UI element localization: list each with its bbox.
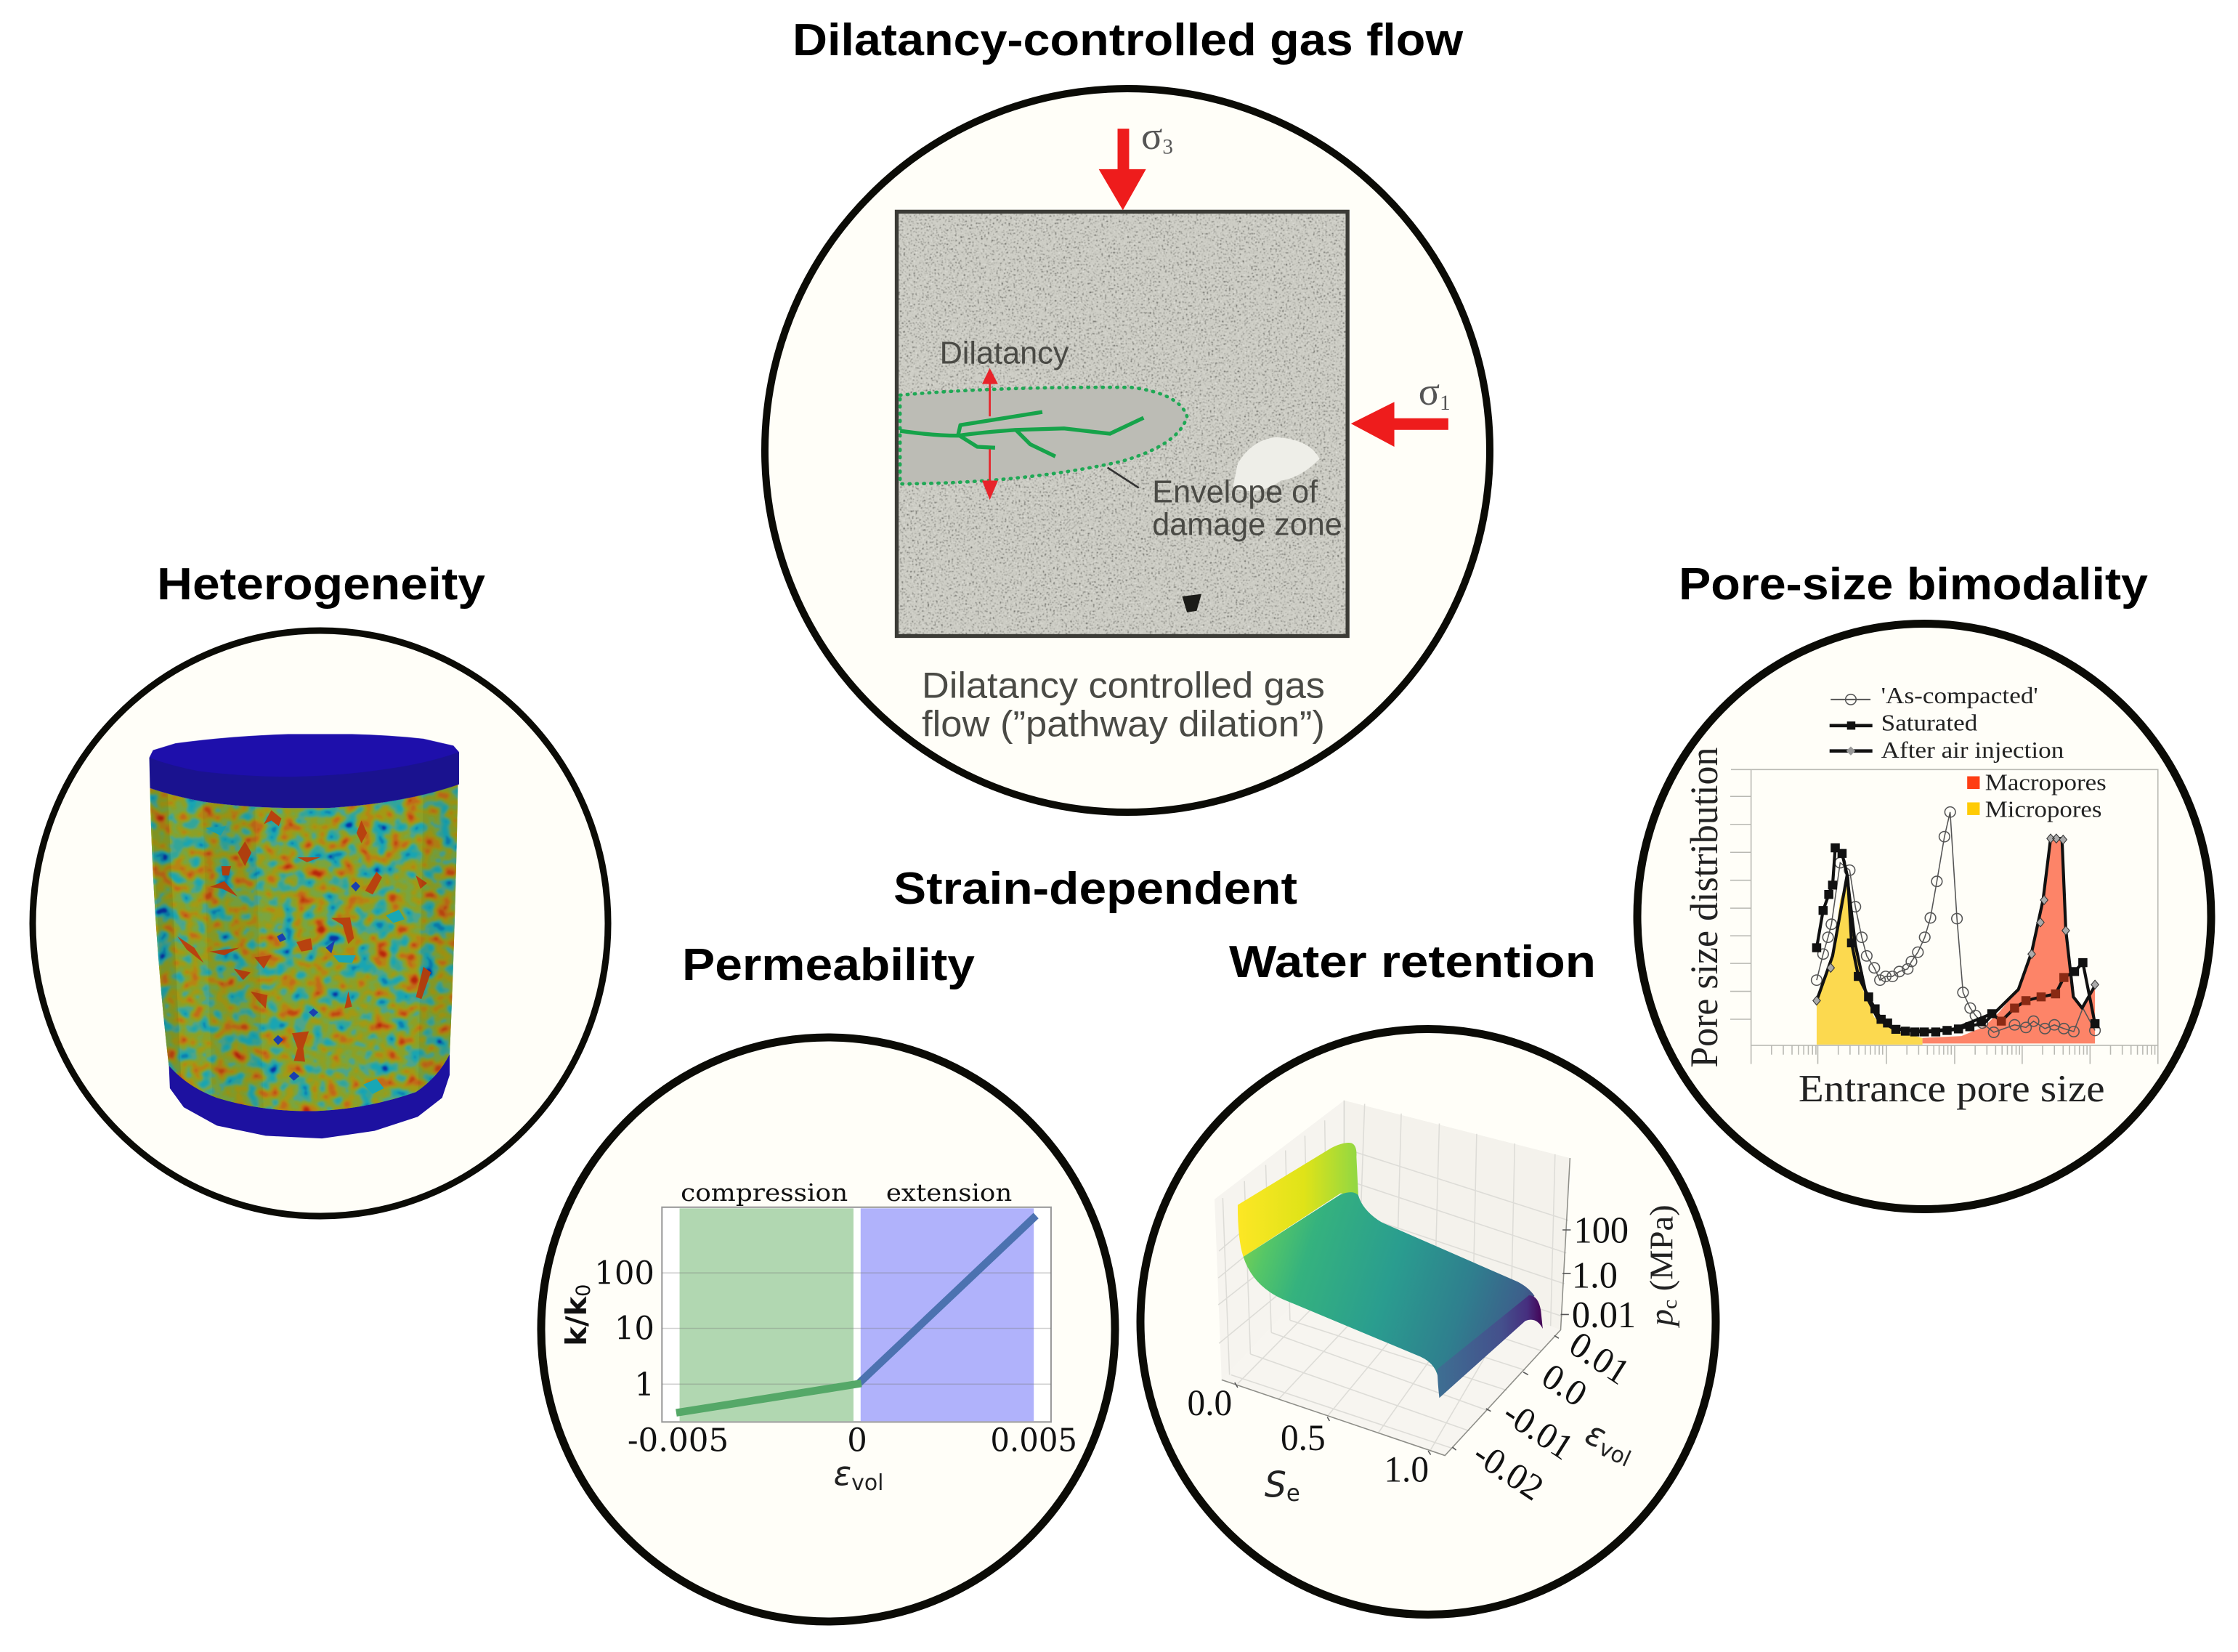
y tick labels: 10 — [615, 1310, 654, 1348]
caption: Dilatancy controlled gas — [922, 665, 1325, 706]
z ticks: 1.0 — [1572, 1255, 1618, 1297]
legend: pore types: Micropores — [1985, 796, 2101, 822]
legend: pore types — [1967, 769, 2107, 822]
extension line — [858, 1215, 1036, 1384]
legend: pore types: Macropores — [1985, 769, 2107, 795]
saturation ticks: 1.0 — [1384, 1449, 1429, 1490]
legend: series: 'As-compacted' — [1881, 682, 2038, 708]
heading: strain-dependent: Strain-dependent — [893, 864, 1297, 914]
surface end face — [1438, 1295, 1543, 1398]
arrow: sigma 3 — [1099, 129, 1146, 210]
label: dilatancy: Dilatancy — [940, 336, 1069, 371]
green fracture network — [900, 412, 1143, 456]
as-compacted series — [1812, 807, 2100, 1037]
y tick labels: 100 — [594, 1255, 654, 1292]
label: envelope of damage zone: Envelope of — [1152, 474, 1318, 509]
zone labels: extension — [886, 1179, 1012, 1207]
cylinder top band — [149, 752, 459, 808]
label: sigma 1: 1 — [1440, 392, 1451, 415]
x tick labels — [628, 1422, 1077, 1459]
label: envelope of damage zone: damage zone — [1152, 508, 1342, 543]
saturation ticks: 0.0 — [1188, 1382, 1232, 1423]
x tick labels: 0 — [847, 1422, 867, 1459]
cylinder top surface — [149, 734, 459, 777]
y axis label: Pore size distribution — [1682, 747, 1726, 1068]
strain axis label: ε — [1580, 1412, 1612, 1457]
panel: water retention circle — [1140, 1029, 1716, 1614]
y axis label: 0 — [572, 1284, 595, 1297]
x tick labels: -0.005 — [628, 1422, 729, 1459]
panel: pore-size circle — [1637, 623, 2211, 1209]
legend: series — [1830, 682, 2064, 763]
title: dilatancy-controlled gas flow: Dilatancy-controlled gas flow — [792, 15, 1464, 65]
strain ticks — [1467, 1323, 1637, 1509]
z ticks: 0.01 — [1572, 1294, 1636, 1336]
title: water retention: Water retention — [1229, 937, 1596, 987]
plot frame and ticks — [1730, 769, 2158, 1064]
plot area — [662, 1207, 1051, 1422]
title: pore-size bimodality: Pore-size bimodality — [1679, 559, 2149, 610]
strain ticks: 0.0 — [1535, 1355, 1594, 1414]
zone labels — [681, 1179, 1012, 1207]
y axis label: k/k — [560, 1297, 593, 1346]
micropores area — [1817, 876, 1923, 1045]
x axis label: vol — [851, 1470, 884, 1496]
title: permeability: Permeability — [682, 940, 976, 990]
saturation ticks — [1188, 1382, 1429, 1490]
damage zone envelope — [900, 387, 1187, 484]
compression line — [676, 1383, 861, 1413]
y tick labels: 1 — [634, 1366, 654, 1404]
water retention surface — [1244, 1192, 1535, 1382]
envelope leader line — [1108, 468, 1139, 487]
caption — [922, 665, 1325, 745]
cylinder bottom platen — [169, 1050, 450, 1138]
strain axis label: vol — [1595, 1436, 1634, 1473]
cylinder facet shading — [150, 785, 458, 1119]
dilatancy red arrows — [982, 368, 998, 500]
panel: heterogeneity circle — [33, 631, 608, 1216]
saturation ticks: 0.5 — [1281, 1417, 1326, 1458]
z axis label: p — [1643, 1309, 1680, 1328]
z ticks — [1572, 1210, 1636, 1336]
panel: dilatancy circle — [765, 89, 1490, 812]
z axis label: c — [1658, 1300, 1682, 1309]
x axis label: Entrance pore size — [1799, 1066, 2105, 1110]
z axis label: (MPa) — [1643, 1204, 1680, 1300]
yellow retention wall — [1238, 1143, 1358, 1257]
zone labels: compression — [681, 1179, 848, 1207]
caption: flow (”pathway dilation”) — [922, 703, 1325, 745]
x axis label: ε — [834, 1454, 851, 1494]
cylinder heterogeneous field — [145, 780, 461, 1119]
macropores area — [1923, 838, 2095, 1043]
compression zone — [680, 1208, 854, 1421]
rock sample with speckle texture — [896, 211, 1347, 636]
x tick labels: 0.005 — [990, 1422, 1077, 1459]
saturation axis label: S — [1265, 1465, 1286, 1506]
saturated series — [1812, 843, 2099, 1037]
3d axes panes — [1215, 1101, 1570, 1456]
panel: permeability circle — [541, 1037, 1115, 1621]
label: sigma 1: σ — [1419, 369, 1440, 413]
legend: series: Saturated — [1881, 710, 1977, 735]
extension zone — [861, 1208, 1034, 1421]
strain ticks: -0.02 — [1467, 1432, 1551, 1509]
arrow: sigma 1 — [1351, 402, 1448, 447]
strain ticks: 0.01 — [1562, 1323, 1637, 1393]
title: heterogeneity: Heterogeneity — [157, 559, 486, 610]
after air injection series — [1813, 834, 2099, 1032]
saturation axis label: e — [1286, 1481, 1300, 1507]
label: sigma 3: σ — [1141, 113, 1162, 158]
label: sigma 3: 3 — [1162, 136, 1173, 159]
legend: series: After air injection — [1881, 737, 2064, 763]
z ticks: 100 — [1574, 1210, 1629, 1252]
strain ticks: -0.01 — [1496, 1391, 1581, 1468]
